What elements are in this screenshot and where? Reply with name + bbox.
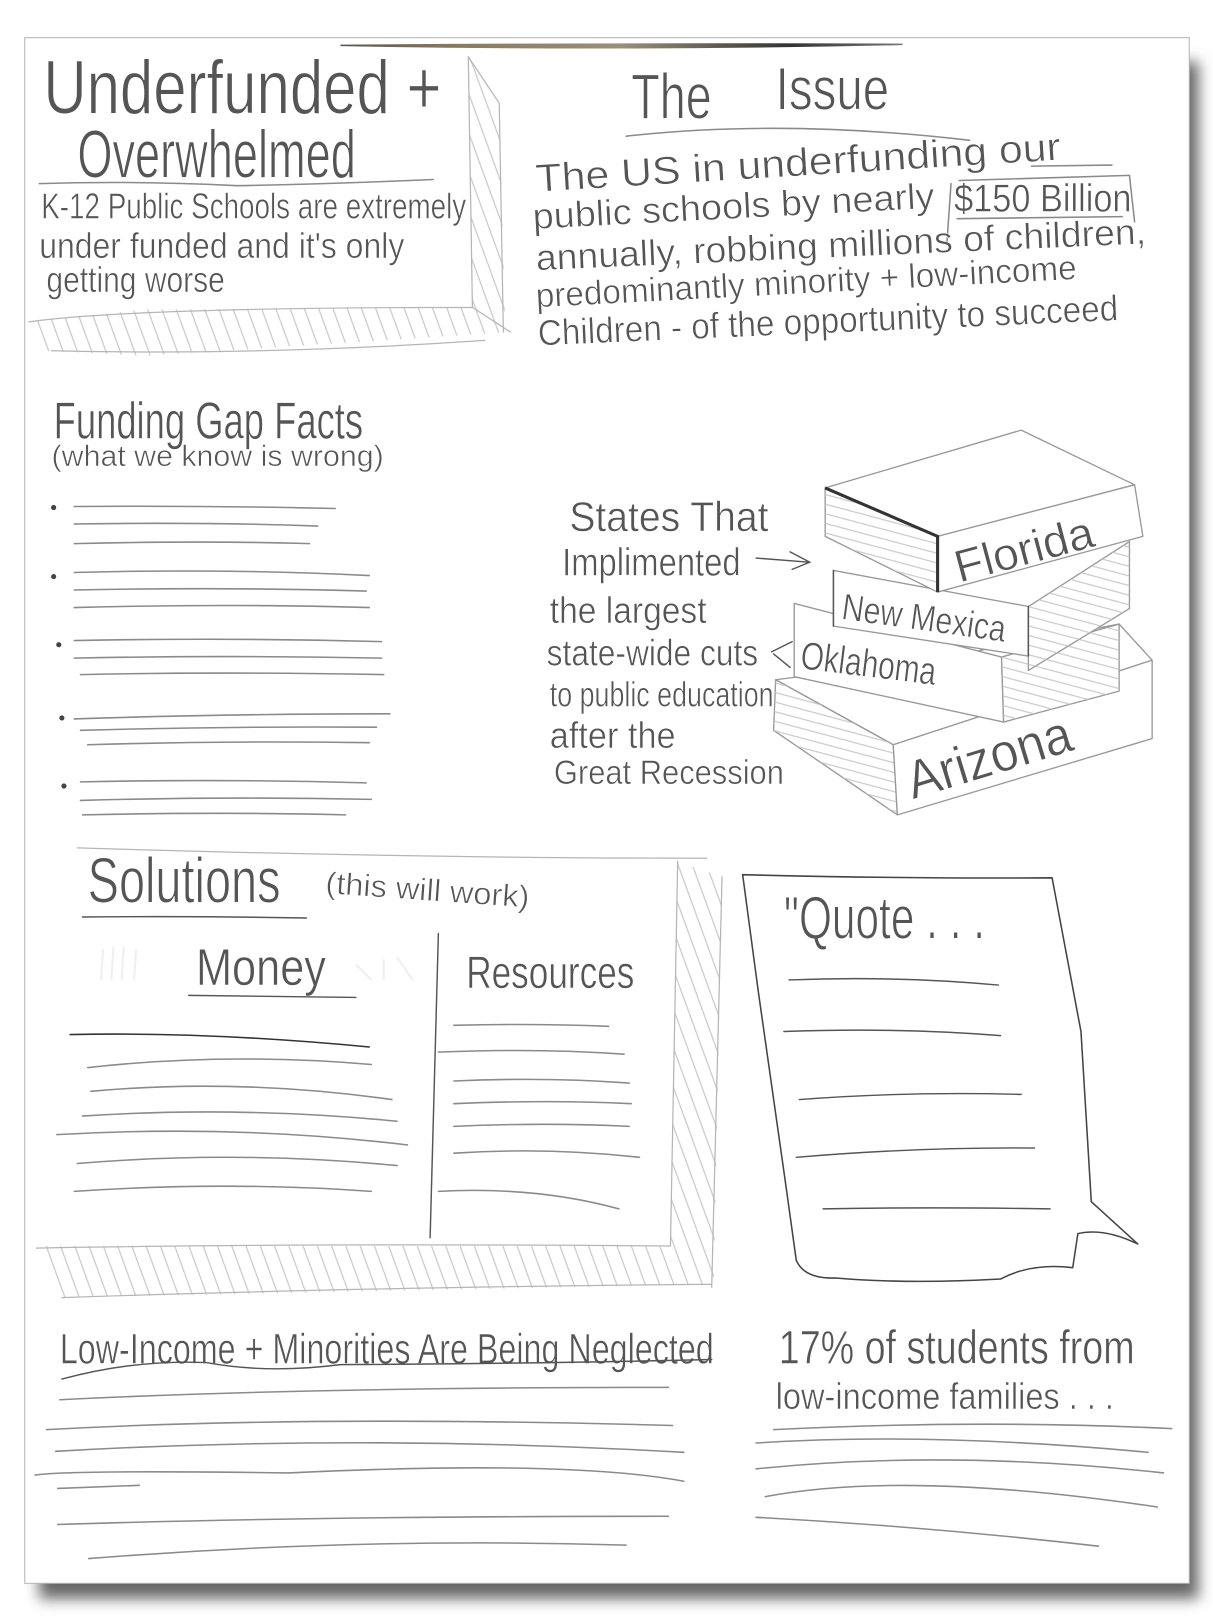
panel: title block [29,45,511,356]
issue body text: predominantly minority + low-income [535,249,1078,315]
caption: states with largest cuts: state-wide cuts [547,631,758,673]
panel: low-income and minorities [35,1326,714,1559]
subtitle text: getting worse [46,259,225,300]
heading: The Issue: Issue [776,55,889,122]
heading: Funding Gap Facts [52,391,384,473]
body lines [35,1387,684,1559]
heading: Solutions: Solutions [88,845,281,917]
book stack illustration [774,430,1152,815]
heading: The Issue [626,55,970,140]
fact bullet 5 [61,781,371,815]
panel: funding gap facts [51,391,390,815]
column: Money: Money [196,938,326,996]
title: Underfunded + [43,45,441,130]
subtitle text: under funded and it's only [39,225,404,266]
heading: Funding Gap Facts: Funding Gap Facts [54,391,363,449]
caption: states with largest cuts: to public education [550,676,774,715]
book: Arizona [774,624,1152,815]
heading: The Issue: The [631,61,712,133]
panel: 17% statistic [756,1322,1172,1546]
fact bullet 1 [51,505,335,544]
heading: Solutions: (this will work) [324,865,531,914]
issue body text: The US in underfunding our [534,126,1062,201]
statistic heading [776,1322,1135,1417]
heading: neglected: Low-Income + Minorities Are Being Neglected [60,1326,714,1373]
statistic heading: low-income families . . . [776,1375,1114,1417]
arrow: to book stack [756,552,810,569]
issue body text: annually, robbing millions of children, [535,211,1147,278]
issue body text: $150 Billion [954,177,1132,220]
panel: quote speech bubble [743,875,1138,1281]
hatched frame of title block [29,57,511,356]
book: Florida: Florida [949,506,1100,592]
title [39,45,441,192]
column: Resources: Resources [466,947,634,998]
caption: states with largest cuts: States That [569,494,769,540]
caption: states with largest cuts [547,494,784,792]
book: Oklahoma: Oklahoma [798,635,939,694]
subtitle text [39,186,466,300]
fact bullet 2 [51,571,369,608]
quote lines [784,979,1050,1209]
book: New Mexico: New Mexica [840,585,1009,650]
arrow: to Oklahoma [772,642,792,667]
fact bullet 4 [59,714,390,745]
subtitle text: K-12 Public Schools are extremely [41,186,466,227]
panel: solutions [36,845,722,1298]
heading: Solutions [83,845,531,918]
fact bullet 3 [56,639,384,675]
heading: neglected [60,1326,714,1379]
quote heading: "Quote . . . [784,885,985,952]
title: Overwhelmed [77,116,356,192]
column: Money [57,938,413,1191]
book: Arizona: Arizona [899,704,1079,811]
caption: states with largest cuts: Great Recession [554,754,784,792]
column divider [430,933,438,1238]
book: Florida [825,430,1143,592]
issue body text [532,126,1147,354]
caption: states with largest cuts: after the [550,714,676,756]
issue body text: public schools by nearly [532,175,935,237]
column: Resources [438,947,640,1209]
caption: states with largest cuts: Implimented [562,542,741,585]
book: Oklahoma [794,603,1119,722]
statistic lines [756,1424,1172,1546]
hatched frame of solutions panel [36,848,722,1298]
issue body text: Children - of the opportunity to succeed [537,287,1119,354]
caption: states with largest cuts: the largest [550,589,707,631]
book: New Mexico [833,542,1129,670]
heading: Funding Gap Facts: (what we know is wrong) [52,440,384,473]
panel: the issue [532,55,1147,354]
